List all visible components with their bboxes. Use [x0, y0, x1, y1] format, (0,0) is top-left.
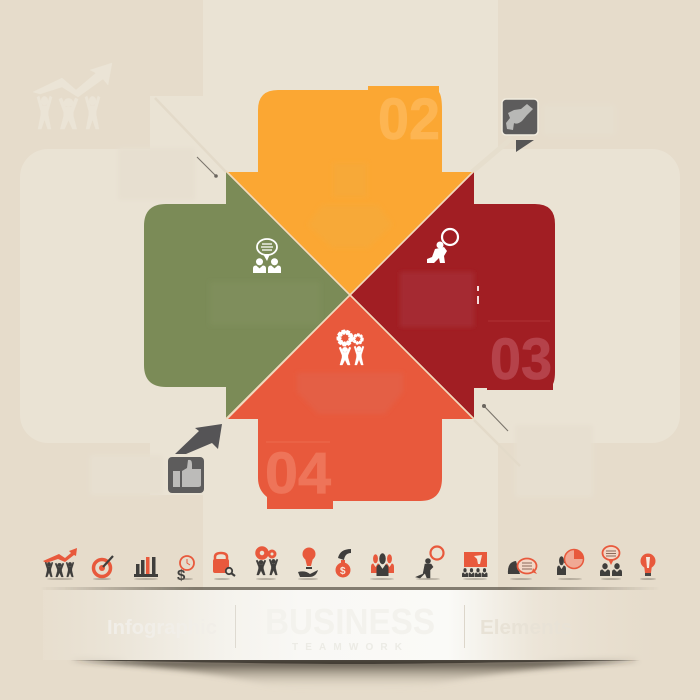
icon: bar chart	[134, 557, 158, 577]
icon: target with dart	[94, 556, 113, 576]
icon: thumbs up	[173, 460, 201, 487]
icon: people holding gears	[256, 548, 278, 575]
ribbon top shadow	[40, 587, 660, 590]
rule above number 03	[488, 320, 550, 322]
ribbon label: TEAMWORK: TEAMWORK	[292, 642, 403, 653]
icon: hand with light bulb	[298, 548, 318, 577]
connector: lower right pale diagonal	[474, 420, 520, 466]
divider right	[464, 605, 465, 648]
panel: green arrow 01	[144, 172, 349, 418]
icon: overlapping speech bubbles	[508, 558, 537, 574]
text patch: lower left caption	[90, 455, 163, 495]
icon: person pushing circle	[416, 546, 444, 578]
icon: presenter with pie chart	[557, 550, 584, 575]
ribbon banner	[40, 587, 660, 689]
panel: coral arrow 04	[228, 296, 473, 509]
connector: upper right pale diagonal	[472, 138, 512, 172]
background: horizontal rounded panel	[20, 149, 680, 443]
pointer: upper left line with dot	[197, 157, 218, 178]
text patch: coral caption	[297, 373, 403, 414]
pointer: lower right line with dot	[482, 404, 508, 431]
icon: three people group	[371, 553, 394, 576]
icon: hand with money bag: $	[340, 566, 346, 577]
connector: upper left pale diagonal	[155, 98, 226, 172]
text patch: orange body block	[308, 205, 392, 248]
icon: presentation board and audience	[462, 552, 488, 577]
number 04: 04	[265, 441, 331, 506]
text patch: lower right caption	[515, 425, 593, 497]
ribbon bottom shadow	[70, 660, 640, 689]
text patch: upper right caption	[543, 105, 615, 135]
ribbon dark lower edge	[70, 660, 640, 664]
icon: two people holding gears	[339, 332, 364, 365]
number 03: 03	[490, 327, 552, 392]
text patch: upper left caption	[118, 148, 195, 200]
ribbon label: BUSINESS: BUSINESS	[265, 601, 435, 642]
icon: dollar and clock: $	[177, 567, 186, 584]
number 02: 02	[378, 87, 440, 152]
ribbon label: Infographic: Infographic	[107, 617, 217, 639]
text patch: green caption	[210, 282, 320, 325]
icon row	[43, 546, 656, 584]
callout: lower left grey icon with arrow	[168, 424, 222, 493]
icon: hand with money bag	[336, 549, 351, 578]
ribbon label: Elements: Elements	[480, 617, 572, 639]
callout: upper right grey icon	[502, 99, 538, 152]
icon: faint teamwork lifting arrow	[33, 63, 112, 129]
ribbon body	[43, 590, 657, 660]
panel: orange arrow 02	[228, 86, 472, 295]
icon shadows	[47, 578, 656, 580]
icon: person pushing circle	[427, 229, 458, 263]
icon: two people with speech bubble	[600, 546, 622, 576]
icon: dollar and clock	[177, 556, 194, 584]
stray white marks	[477, 286, 479, 304]
background: upper left light tab	[150, 96, 204, 150]
icon: light bulb	[640, 554, 656, 576]
icon: team lifting arrow	[43, 548, 77, 577]
diagonal separators	[226, 171, 474, 419]
icon: padlock with magnifier	[213, 553, 235, 576]
icon: hand holding key	[506, 104, 533, 130]
background: vertical light band	[203, 0, 498, 590]
central cross diagram	[144, 86, 555, 509]
text patch: orange head block	[333, 163, 367, 197]
rule above number 04	[266, 441, 330, 443]
arrow	[175, 424, 222, 454]
background: lower left light tab	[150, 443, 204, 495]
pointer triangle	[516, 140, 534, 152]
icon: two people with speech bubble	[253, 239, 281, 273]
divider left	[235, 605, 236, 648]
text patch: red caption	[400, 272, 474, 327]
panel: red arrow 03	[351, 172, 555, 418]
